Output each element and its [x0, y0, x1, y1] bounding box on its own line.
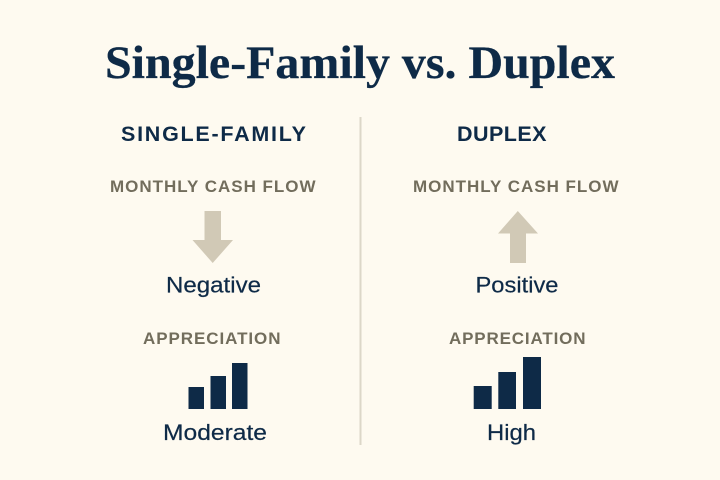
value: moderate: Moderate	[163, 420, 267, 445]
value: negative: Negative	[166, 272, 261, 298]
heading: duplex: DUPLEX	[457, 122, 547, 146]
icon: up arrow	[498, 211, 538, 263]
heading: single-family: SINGLE-FAMILY	[121, 122, 306, 146]
icon: down arrow	[192, 211, 233, 263]
label: monthly cash flow: MONTHLY CASH FLOW	[413, 177, 619, 196]
panel: duplex	[413, 122, 619, 445]
label: appreciation: APPRECIATION	[449, 329, 586, 348]
panel: single-family	[110, 122, 316, 445]
title: Single-Family vs. Duplex	[105, 37, 615, 89]
value: high: High	[487, 420, 536, 445]
value: positive: Positive	[476, 272, 558, 298]
bar chart: moderate appreciation	[188, 363, 248, 409]
label: monthly cash flow: MONTHLY CASH FLOW	[110, 177, 316, 196]
label: appreciation: APPRECIATION	[143, 329, 280, 348]
bar chart: high appreciation	[474, 357, 541, 409]
